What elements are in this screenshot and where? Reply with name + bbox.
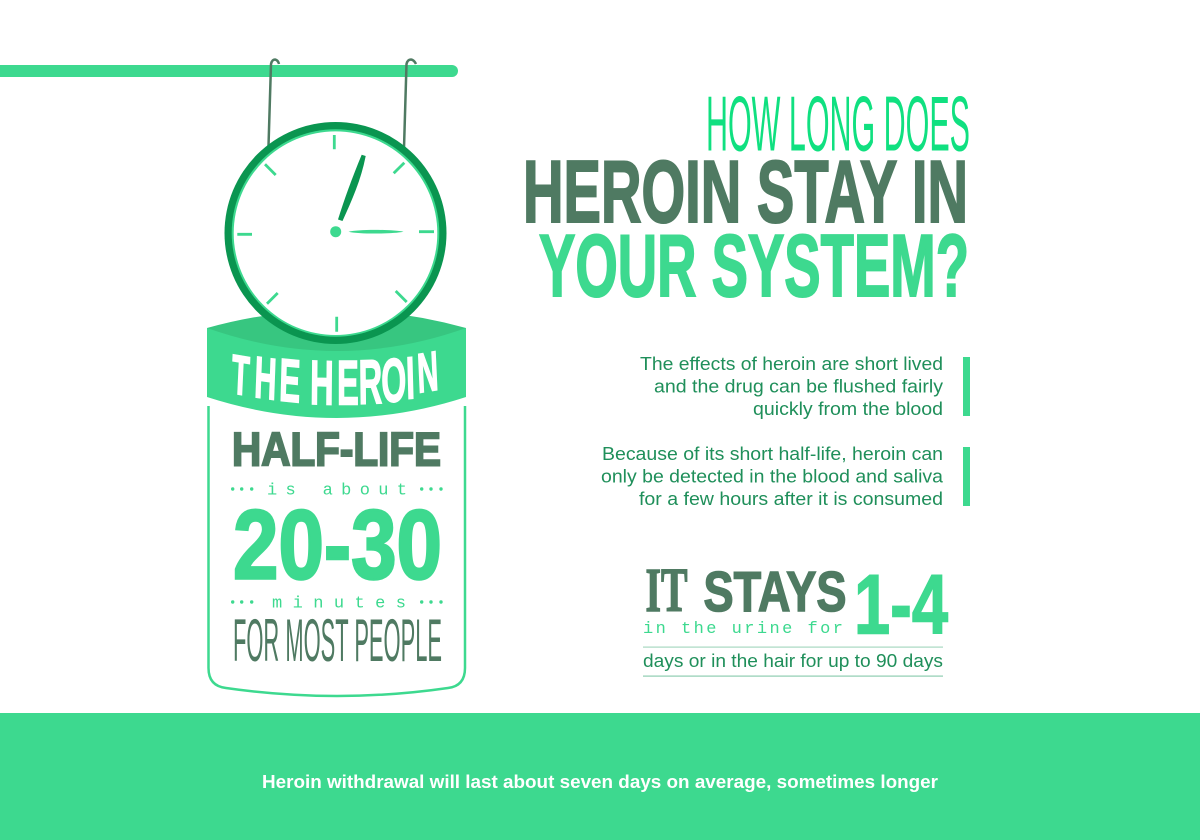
accent bar: [963, 357, 970, 416]
banner text: the heroin: E: [337, 348, 359, 418]
label: minutes: [231, 594, 443, 614]
hanging rail: [0, 65, 458, 77]
banner fold: [207, 310, 466, 351]
heading: half-life: HALF-LIFE: [232, 422, 441, 476]
heading: it stays: IT: [646, 557, 688, 625]
panel: half-life sign: [207, 310, 466, 696]
rule: [643, 676, 943, 677]
rule: [643, 646, 943, 648]
clock hour hand: [338, 155, 366, 221]
text block: half-life detection: only be detected in the blood and saliva: [601, 466, 944, 486]
title line: heroin stay in: HEROIN STAY IN: [523, 142, 968, 241]
banner text: the heroin: I: [405, 346, 416, 413]
sign outline: [208, 406, 465, 696]
clock minute hand: [348, 230, 404, 234]
label: is about: [231, 482, 443, 500]
icon: clock: [224, 122, 446, 344]
text block: effects: [640, 354, 943, 419]
accent bar: [963, 447, 970, 506]
sign banner: [207, 328, 466, 418]
banner text: the heroin: H: [310, 348, 334, 419]
text: FOR MOST PEOPLE: [233, 607, 442, 674]
banner text: the heroin: H: [253, 343, 278, 412]
heading: it stays: STAYS: [704, 560, 846, 624]
banner text: the heroin: R: [358, 347, 383, 418]
label: in the urine for: in the urine for: [643, 620, 843, 639]
banner text: the heroin: O: [381, 346, 407, 416]
label: is about: is about: [267, 482, 407, 500]
footer band: [0, 713, 1200, 840]
figure: 1-4: 1-4: [854, 558, 948, 652]
banner text: the heroin: N: [416, 341, 440, 405]
title: [523, 80, 970, 315]
sign hooks: [268, 60, 416, 148]
text block: half-life detection: [601, 444, 944, 509]
heading: it stays: [646, 557, 846, 625]
footer text: Heroin withdrawal will last about seven days on average, sometimes longer: [262, 772, 938, 792]
text block: effects: and the drug can be flushed fairly: [654, 376, 943, 396]
text block: half-life detection: for a few hours after it is consumed: [639, 489, 943, 509]
label: minutes: minutes: [272, 594, 406, 614]
text: days or in the hair: days or in the hair for up to 90 days: [643, 651, 943, 671]
panel: urine and hair detection: [643, 557, 948, 677]
clock centre: [330, 226, 341, 237]
banner text: the heroin: T: [230, 344, 251, 408]
figure: 20-30: 20-30: [233, 490, 442, 600]
text block: effects: quickly from the blood: [753, 399, 943, 419]
text block: half-life detection: Because of its short half-life, heroin can: [602, 444, 943, 464]
banner text: the heroin: E: [278, 347, 301, 416]
text block: effects: The effects of heroin are short lived: [640, 354, 943, 374]
